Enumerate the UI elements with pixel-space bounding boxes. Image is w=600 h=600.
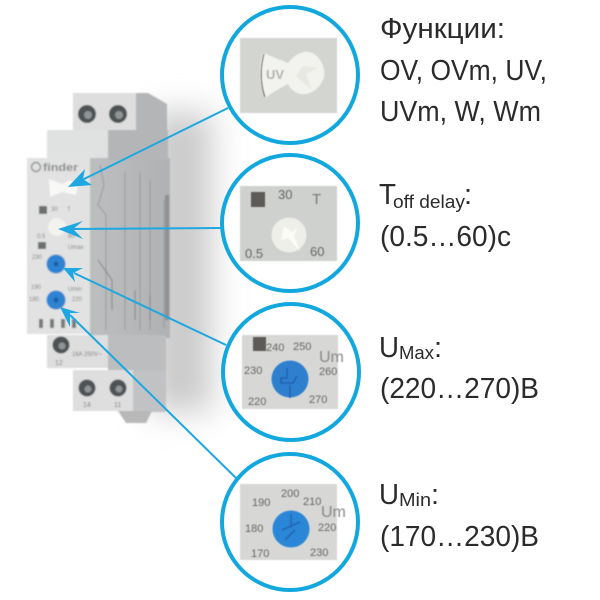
circle: time delay: 30: [278, 187, 292, 202]
UMax knob: [46, 254, 66, 274]
face labels: Umax: [68, 245, 84, 251]
lower terminal: 12: [55, 360, 63, 367]
text: functions: [380, 13, 547, 128]
text: functions: Функции:: [380, 13, 505, 45]
text: Umax: (220…270)B: [380, 373, 539, 405]
middle step: [47, 130, 108, 158]
circle: Umin: 170: [251, 548, 269, 560]
face labels: 30: [51, 207, 58, 213]
circle: Umin: [222, 454, 358, 590]
circle: time delay: 60: [310, 244, 324, 259]
device shadow: [150, 112, 212, 412]
text: functions: UVm, W, Wm: [380, 96, 541, 128]
brand logo: [32, 162, 79, 174]
face labels: 220: [72, 297, 83, 303]
text: time delay: [379, 179, 511, 253]
side panel: [90, 130, 170, 412]
circle: function selector: [222, 7, 358, 143]
text: Umax: :: [434, 332, 442, 364]
bottom terminal: 11: [114, 402, 121, 409]
UMin knob: [46, 290, 66, 310]
selector knob: UV: [266, 67, 284, 82]
brand logo: finder: [43, 162, 79, 174]
circle: Umin: 200: [281, 488, 299, 500]
circle: time delay: 0.5: [245, 246, 263, 261]
mounting clip: [118, 411, 152, 423]
text: Umin: [379, 479, 539, 553]
blue knob: [272, 510, 310, 548]
circle: Umin: 230: [310, 547, 328, 559]
circle: Umax: 230: [244, 365, 262, 377]
text: functions: OV, OVm, UV,: [380, 55, 547, 87]
lower terminal: [47, 335, 108, 368]
circle: Umin: Um: [321, 504, 346, 521]
text: Umin: U: [379, 479, 399, 511]
circle: time delay: T: [312, 191, 321, 208]
text: Umax: Max: [399, 343, 434, 363]
text: Umax: [379, 332, 539, 405]
blue knob: [272, 360, 308, 398]
face labels: T: [67, 207, 71, 213]
text: time delay: T: [379, 179, 396, 211]
text: Umax: U: [379, 332, 399, 364]
device: relay: [27, 93, 170, 423]
text: time delay: off delay: [393, 192, 465, 212]
lower terminal: 16A 250V~: [72, 352, 102, 358]
arrow: time delay: [58, 221, 222, 239]
small slots: [39, 319, 76, 328]
circle: Umin: 220: [318, 522, 336, 534]
function selector: [49, 179, 78, 197]
text: time delay: :: [464, 179, 472, 211]
circle: Umin: 190: [252, 497, 270, 509]
arrow: Umax: [63, 268, 226, 345]
text: Umin: Min: [399, 490, 431, 510]
circle: Umax: 240: [266, 342, 284, 354]
circle: Umax: 250: [293, 341, 311, 353]
face labels: [29, 207, 84, 303]
face labels: 180: [29, 297, 40, 303]
bottom terminal: 14: [83, 402, 91, 409]
circle: Umax: 260: [319, 366, 337, 378]
circle: Umin: 210: [303, 496, 321, 508]
circle: Umax: [223, 304, 359, 440]
front face: [27, 158, 90, 334]
time knob: [48, 218, 66, 236]
time knob: [272, 218, 306, 252]
face labels: 230: [32, 255, 43, 261]
circle: time delay: [222, 155, 358, 291]
circle: Umax: Um: [319, 349, 344, 366]
text: Umin: :: [431, 479, 439, 511]
text: Umin: (170…230)B: [380, 521, 539, 553]
indicator square: [251, 192, 265, 207]
circle: Umax: 220: [248, 396, 266, 408]
face labels: 0.5: [37, 234, 46, 240]
face labels: 190: [31, 285, 42, 291]
text: time delay: (0.5…60)c: [380, 221, 511, 253]
bottom terminal: [73, 370, 133, 411]
face labels: 60: [68, 234, 75, 240]
face labels: Umin: [68, 287, 82, 293]
arrow: functions: [68, 108, 228, 187]
top terminal block: [73, 93, 167, 160]
arrow: Umin: [60, 307, 236, 478]
circle: Umin: 180: [245, 523, 263, 535]
circle: Umax: 270: [309, 394, 327, 406]
